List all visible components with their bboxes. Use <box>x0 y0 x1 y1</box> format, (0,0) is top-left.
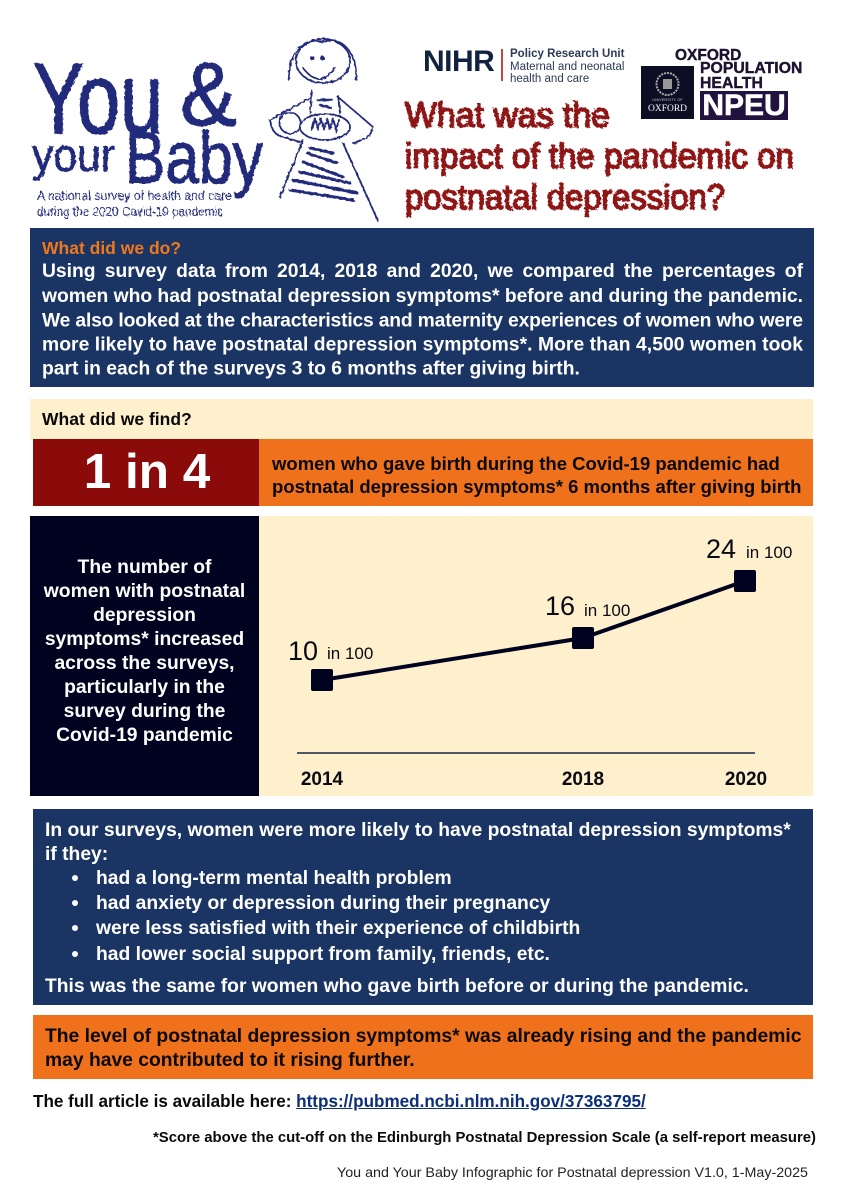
text: methods: We also looked at the characteristics and maternity experiences of women who were <box>42 310 803 332</box>
logo: NIHR Policy Research Unit <box>423 45 624 85</box>
label: 2020 value: in 100 <box>746 543 792 562</box>
heading: what did we do: What did we do? <box>42 238 181 258</box>
panel: chart description: particularly in the <box>64 677 225 698</box>
logo: NIHR Policy Research Unit: Maternal and neonatal <box>510 60 624 72</box>
callout: conclusion: may have contributed to it rising further. <box>45 1050 415 1071</box>
logo: You & your Baby <box>31 43 264 219</box>
logo: NIHR Policy Research Unit: NIHR <box>423 45 494 78</box>
label: 2018 value: in 100 <box>584 601 630 620</box>
text: footnote: *Score above the cut-off on the Edinburgh Postnatal Depression Scale (a self-report measure) <box>153 1129 816 1146</box>
logo: You & your Baby: A national survey of health and care <box>37 189 232 203</box>
axis labels: 2014 <box>301 769 344 790</box>
title: postnatal depression? <box>405 178 725 217</box>
logo: You & your Baby: & <box>180 45 237 145</box>
axis labels <box>301 769 767 790</box>
label: 2020 value <box>706 534 792 564</box>
logo: Oxford Population Health NPEU: UNIVERSITY OF <box>652 97 683 102</box>
text: same before and during: This was the same for women who gave birth before or during the pandemic. <box>45 976 749 997</box>
text: methods <box>41 261 804 380</box>
panel: who was more likely <box>33 809 813 1005</box>
panel: what did we do <box>30 228 814 387</box>
heading: what did we find: What did we find? <box>42 409 192 429</box>
logo: Oxford Population Health NPEU: OXFORD <box>648 104 687 114</box>
label: 2020 value: 24 <box>706 534 736 564</box>
panel: chart description: across the surveys, <box>54 653 235 674</box>
stat: 1 in 4: 1 in 4 <box>84 444 210 499</box>
logo: You & your Baby: your <box>32 129 115 181</box>
title: impact of the pandemic on <box>405 137 794 176</box>
logo: NIHR Policy Research Unit: health and care <box>510 73 589 85</box>
logo: You & your Baby: Baby <box>125 118 263 199</box>
logo: Oxford Population Health NPEU: OXFORD <box>675 47 741 64</box>
axis labels: 2018 <box>562 769 604 790</box>
panel: chart description: symptoms* increased <box>45 629 244 650</box>
panel: what did we find <box>30 399 813 439</box>
list: risk factors <box>72 868 580 964</box>
list: risk factors: were less satisfied with their experience of childbirth <box>96 918 580 939</box>
text: methods: Using survey data from 2014, 2018 and 2020, we compared the percentages of <box>42 261 803 282</box>
line chart <box>259 516 813 796</box>
logo: Oxford Population Health NPEU <box>641 47 802 122</box>
logo: Oxford Population Health NPEU: NPEU <box>702 89 786 122</box>
text: version: You and Your Baby Infographic for Postnatal depression V1.0, 1-May-2025 <box>337 1164 808 1180</box>
panel: chart description <box>30 516 259 796</box>
text: methods: more likely to have postnatal depression symptoms*. More than 4,500 women took <box>42 334 803 356</box>
logo: You & your Baby: during the 2020 Covid-19 pandemic <box>37 205 223 219</box>
callout: conclusion <box>33 1015 813 1079</box>
logo: Oxford Population Health NPEU: HEALTH <box>700 75 763 92</box>
icon: mother holding baby <box>268 37 378 222</box>
label: 2014 value: in 100 <box>327 644 373 663</box>
panel: chart description: Covid-19 pandemic <box>56 725 233 746</box>
list: risk factors: had lower social support from family, friends, etc. <box>96 944 550 964</box>
panel: chart description: women with postnatal <box>44 581 245 602</box>
label: 2014 value <box>288 636 373 666</box>
callout: 1 in 4 description: women who gave birth during the Covid-19 pandemic had <box>272 452 780 474</box>
callout: 1 in 4 description: postnatal depression symptoms* 6 months after giving birth <box>272 476 801 496</box>
list: risk factors: had anxiety or depression during their pregnancy <box>96 893 550 914</box>
label: 2014 value: 10 <box>288 636 318 666</box>
logo: NIHR Policy Research Unit: Policy Research Unit <box>510 48 624 60</box>
label: 2018 value: 16 <box>545 591 575 621</box>
title: What was the <box>405 96 610 135</box>
label: 2018 value <box>545 591 630 621</box>
text: article link: The full article is available here: https://pubmed.ncbi.nlm.nih.gov/37363795/ <box>33 1092 646 1111</box>
panel: chart description: survey during the <box>64 701 225 722</box>
text: intro: In our surveys, women were more likely to have postnatal depression symptoms* <box>45 820 791 841</box>
axis labels: 2020 <box>725 769 767 790</box>
logo: Oxford Population Health NPEU: POPULATION <box>700 60 802 77</box>
title <box>404 96 794 218</box>
logo: You & your Baby: You <box>33 43 163 155</box>
text: intro: if they: <box>45 844 108 865</box>
panel: chart description: depression <box>93 605 196 626</box>
panel: chart description: The number of <box>78 557 211 578</box>
text: intro <box>45 820 791 865</box>
callout: conclusion: The level of postnatal depression symptoms* was already rising and the pandemic <box>45 1026 801 1047</box>
stat: 1 in 4 <box>33 439 261 506</box>
text: methods: women who had postnatal depression symptoms* before and during the pandemic. <box>41 286 803 307</box>
callout: 1 in 4 description <box>259 439 813 506</box>
list: risk factors: had a long-term mental health problem <box>96 868 452 889</box>
text: methods: part in each of the surveys 3 to 6 months after giving birth. <box>42 358 580 380</box>
